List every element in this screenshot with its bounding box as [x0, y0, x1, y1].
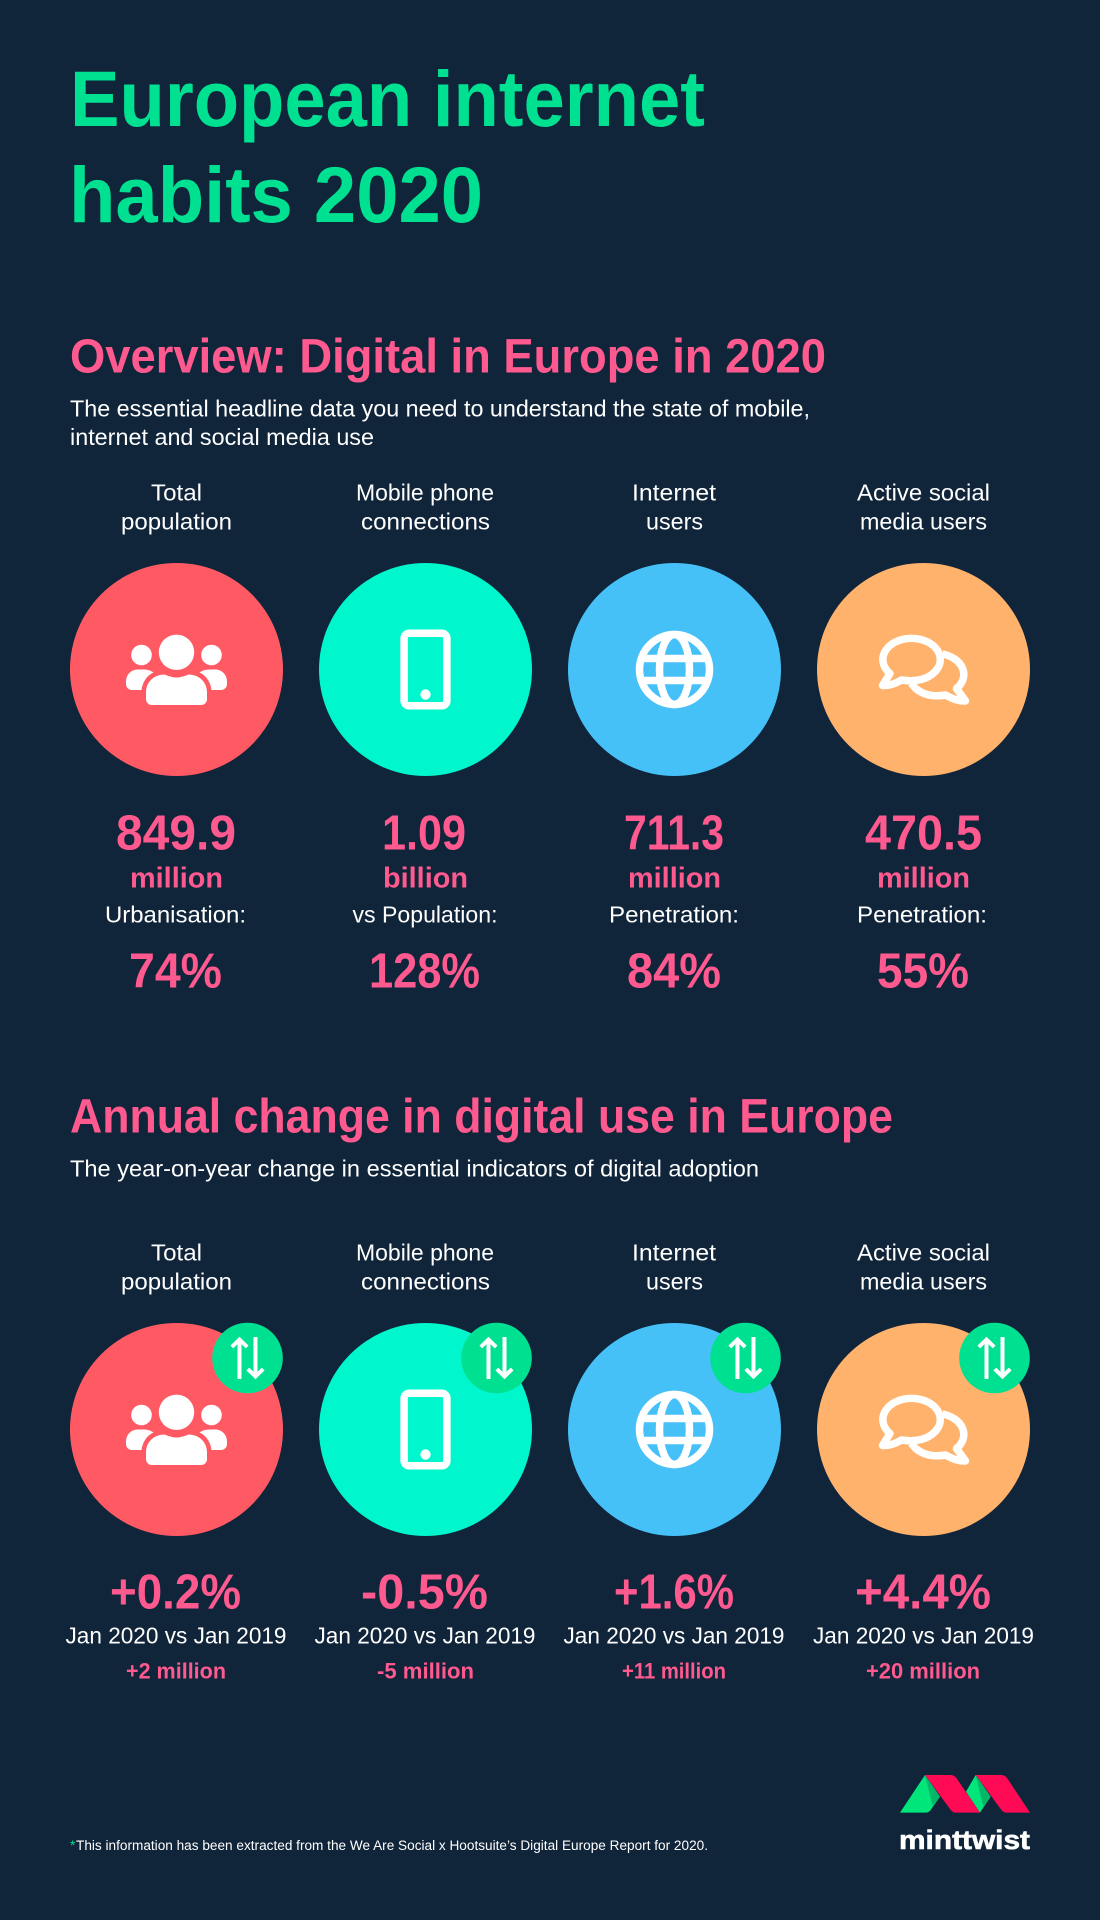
label [356, 1239, 494, 1294]
icon: up-down arrows badge [212, 1323, 283, 1393]
footnote: This information has been extracted from the We Are Social x Hootsuite’s Digital Europe Report for 2020. [76, 1838, 708, 1853]
footnote: * [70, 1838, 76, 1853]
label [857, 1239, 990, 1294]
label: media users [860, 1268, 987, 1294]
value: 711.3 million: million [628, 863, 721, 895]
label: Active social [857, 1239, 990, 1265]
icon: phone in mint circle [319, 1323, 532, 1536]
label: Internet [632, 479, 717, 505]
value: -5 million: -5 million [377, 1658, 474, 1683]
heading: annual change: Annual change in digital use in Europe [70, 1090, 893, 1144]
icon: chat bubbles in orange circle [817, 1323, 1030, 1536]
panel: total population change [66, 1239, 286, 1683]
icon: phone in mint circle [319, 563, 532, 776]
panel: mobile connections overview [319, 479, 532, 998]
label: Mobile phone [356, 1239, 494, 1265]
label: population [121, 1268, 232, 1294]
text: vs population: vs Population: [352, 901, 498, 927]
panel: mobile connections change [314, 1239, 536, 1683]
panel: internet users overview [568, 479, 781, 998]
label: Total [151, 1239, 202, 1265]
label: connections [361, 508, 490, 534]
value: 470.5 million [865, 805, 982, 895]
panel: social media users change [813, 1239, 1034, 1683]
label [857, 479, 990, 534]
label [121, 1239, 232, 1294]
title: European internet [70, 54, 705, 143]
value: 55%: 55% [877, 943, 969, 998]
value: 1.09 billion: 1.09 [382, 805, 466, 860]
value: 84%: 84% [627, 943, 721, 998]
icon: people in red circle [70, 1323, 283, 1536]
label: media users [860, 508, 987, 534]
label: Active social [857, 479, 990, 505]
label [632, 479, 717, 534]
value: 1.09 billion [382, 805, 468, 895]
title: habits 2020 [69, 150, 483, 239]
heading: overview: Overview: Digital in Europe in 2020 [70, 330, 826, 384]
text block: overview intro: The essential headline data you need to understand the state of mobile, [70, 396, 810, 422]
value: 128%: 128% [369, 943, 480, 998]
value: 470.5 million: 470.5 [865, 805, 982, 860]
text: penetration: Penetration: [857, 901, 987, 927]
label: Total [151, 479, 202, 505]
icon: globe in blue circle [568, 1323, 781, 1536]
text: penetration: Penetration: [609, 901, 739, 927]
text: date comparison: Jan 2020 vs Jan 2019 [66, 1622, 286, 1648]
value: 1.09 billion: billion [383, 863, 468, 895]
icon: people in red circle [70, 563, 283, 776]
text: date comparison: Jan 2020 vs Jan 2019 [564, 1622, 784, 1648]
label: Internet [632, 1239, 717, 1265]
value: 74%: 74% [129, 943, 222, 998]
value: +1.6%: +1.6% [614, 1564, 734, 1619]
text block: annual change intro: The year-on-year change in essential indicators of digital adoption [70, 1156, 759, 1182]
text block: overview intro: internet and social media use [70, 424, 374, 450]
text: date comparison: Jan 2020 vs Jan 2019 [813, 1622, 1034, 1648]
value: 470.5 million: million [877, 863, 970, 895]
value: 849.9 million: million [130, 863, 223, 895]
value: +20 million: +20 million [866, 1658, 980, 1683]
value: -0.5%: -0.5% [361, 1564, 488, 1619]
value: 711.3 million [624, 805, 724, 895]
label: connections [361, 1268, 490, 1294]
panel: total population overview [70, 479, 283, 998]
icon: globe in blue circle [568, 563, 781, 776]
value: +11 million: +11 million [622, 1658, 726, 1683]
text: urbanisation: Urbanisation: [105, 901, 246, 927]
value: +0.2%: +0.2% [110, 1564, 241, 1619]
value: +2 million: +2 million [126, 1658, 226, 1683]
label: population [121, 508, 232, 534]
logo: minttwist: minttwist [899, 1825, 1030, 1855]
text: date comparison: Jan 2020 vs Jan 2019 [314, 1622, 536, 1648]
icon: up-down arrows badge [959, 1323, 1030, 1393]
logo: minttwist [899, 1775, 1030, 1855]
label: Mobile phone [356, 479, 494, 505]
text block: overview intro [70, 396, 810, 450]
icon: up-down arrows badge [710, 1323, 781, 1393]
label [632, 1239, 717, 1294]
icon: up-down arrows badge [461, 1323, 532, 1393]
value: 849.9 million [116, 805, 236, 895]
value: 849.9 million: 849.9 [116, 805, 236, 860]
value: +4.4%: +4.4% [855, 1564, 991, 1619]
label [121, 479, 232, 534]
icon: chat bubbles in orange circle [817, 563, 1030, 776]
panel: social media users overview [817, 479, 1030, 998]
panel: internet users change [564, 1239, 784, 1683]
label: users [646, 1268, 703, 1294]
title [69, 54, 705, 239]
label: users [646, 508, 703, 534]
label [356, 479, 494, 534]
value: 711.3 million: 711.3 [624, 805, 724, 860]
